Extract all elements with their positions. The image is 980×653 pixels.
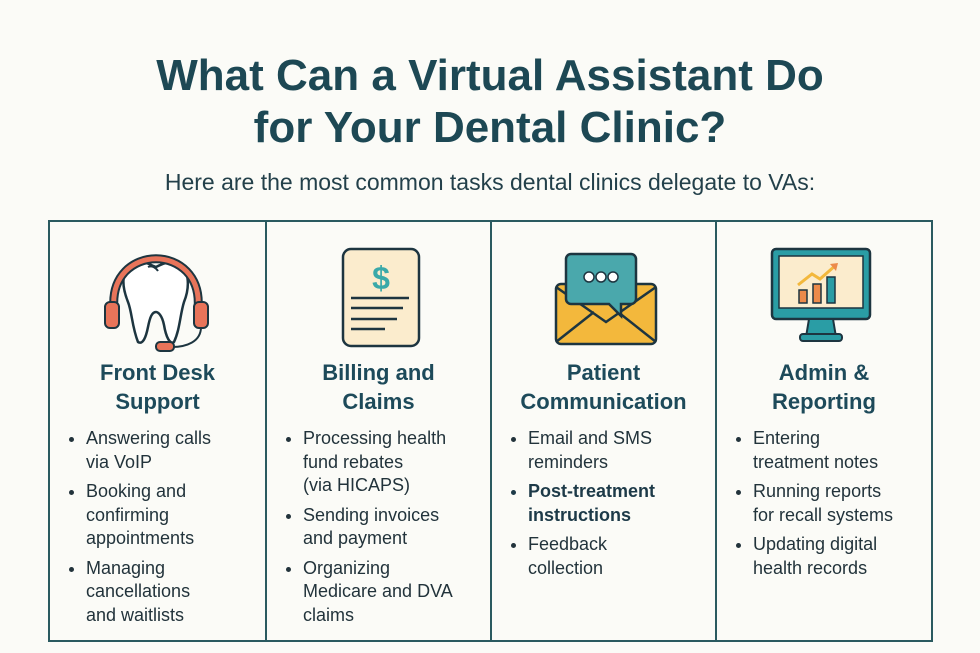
heading: Admin & xyxy=(779,360,869,385)
bullets: instructions xyxy=(528,504,631,524)
heading xyxy=(772,360,876,414)
bullets: fund rebates xyxy=(303,452,403,472)
title: for Your Dental Clinic? xyxy=(254,103,726,152)
bullets: Processing health xyxy=(303,428,446,448)
bullets: and waitlists xyxy=(86,604,184,624)
bullets: confirming xyxy=(86,504,169,524)
bullets: Updating digital xyxy=(753,534,877,554)
icon: monitor chart xyxy=(770,248,872,342)
bullets: treatment notes xyxy=(753,452,878,472)
heading xyxy=(520,360,687,414)
bullets: Entering xyxy=(753,428,820,448)
bullets: Answering calls xyxy=(86,428,211,448)
bullets: for recall systems xyxy=(753,504,893,524)
bullets: Managing xyxy=(86,558,165,578)
icon: tooth headset xyxy=(104,254,209,352)
subtitle: Here are the most common tasks dental clinics delegate to VAs: xyxy=(165,169,815,195)
icon: envelope chat xyxy=(554,252,658,346)
bullets: Running reports xyxy=(753,481,881,501)
bullets xyxy=(286,428,453,624)
heading: Support xyxy=(115,389,200,414)
panel: billing xyxy=(267,222,492,640)
heading xyxy=(322,360,435,414)
bullets: Sending invoices xyxy=(303,504,439,524)
bullets: reminders xyxy=(528,452,608,472)
icon: invoice: $ xyxy=(372,260,390,296)
heading: Reporting xyxy=(772,389,876,414)
bullets: via VoIP xyxy=(86,452,152,472)
bullets: and payment xyxy=(303,528,407,548)
bullets: claims xyxy=(303,604,354,624)
heading: Billing and xyxy=(322,360,435,385)
bullets xyxy=(511,428,655,578)
heading: Communication xyxy=(520,389,687,414)
title xyxy=(156,51,824,152)
panel: admin xyxy=(736,248,893,578)
heading: Claims xyxy=(342,389,415,414)
bullets xyxy=(69,428,211,624)
icon: invoice xyxy=(342,248,420,348)
bullets: Organizing xyxy=(303,558,390,578)
heading xyxy=(100,360,215,414)
bullets: Medicare and DVA xyxy=(303,581,453,601)
panels container xyxy=(48,220,933,642)
bullets: Booking and xyxy=(86,481,186,501)
title: What Can a Virtual Assistant Do xyxy=(156,51,824,100)
bullets: Email and SMS xyxy=(528,428,652,448)
bullets: Post-treatment xyxy=(528,481,655,501)
bullets xyxy=(736,428,893,578)
panel: communication xyxy=(492,222,717,640)
bullets: (via HICAPS) xyxy=(303,475,410,495)
bullets: collection xyxy=(528,558,603,578)
heading: Front Desk xyxy=(100,360,215,385)
bullets: appointments xyxy=(86,528,194,548)
bullets: cancellations xyxy=(86,581,190,601)
heading: Patient xyxy=(567,360,640,385)
bullets: Feedback xyxy=(528,534,607,554)
panel: front desk xyxy=(50,222,267,640)
bullets: health records xyxy=(753,558,867,578)
